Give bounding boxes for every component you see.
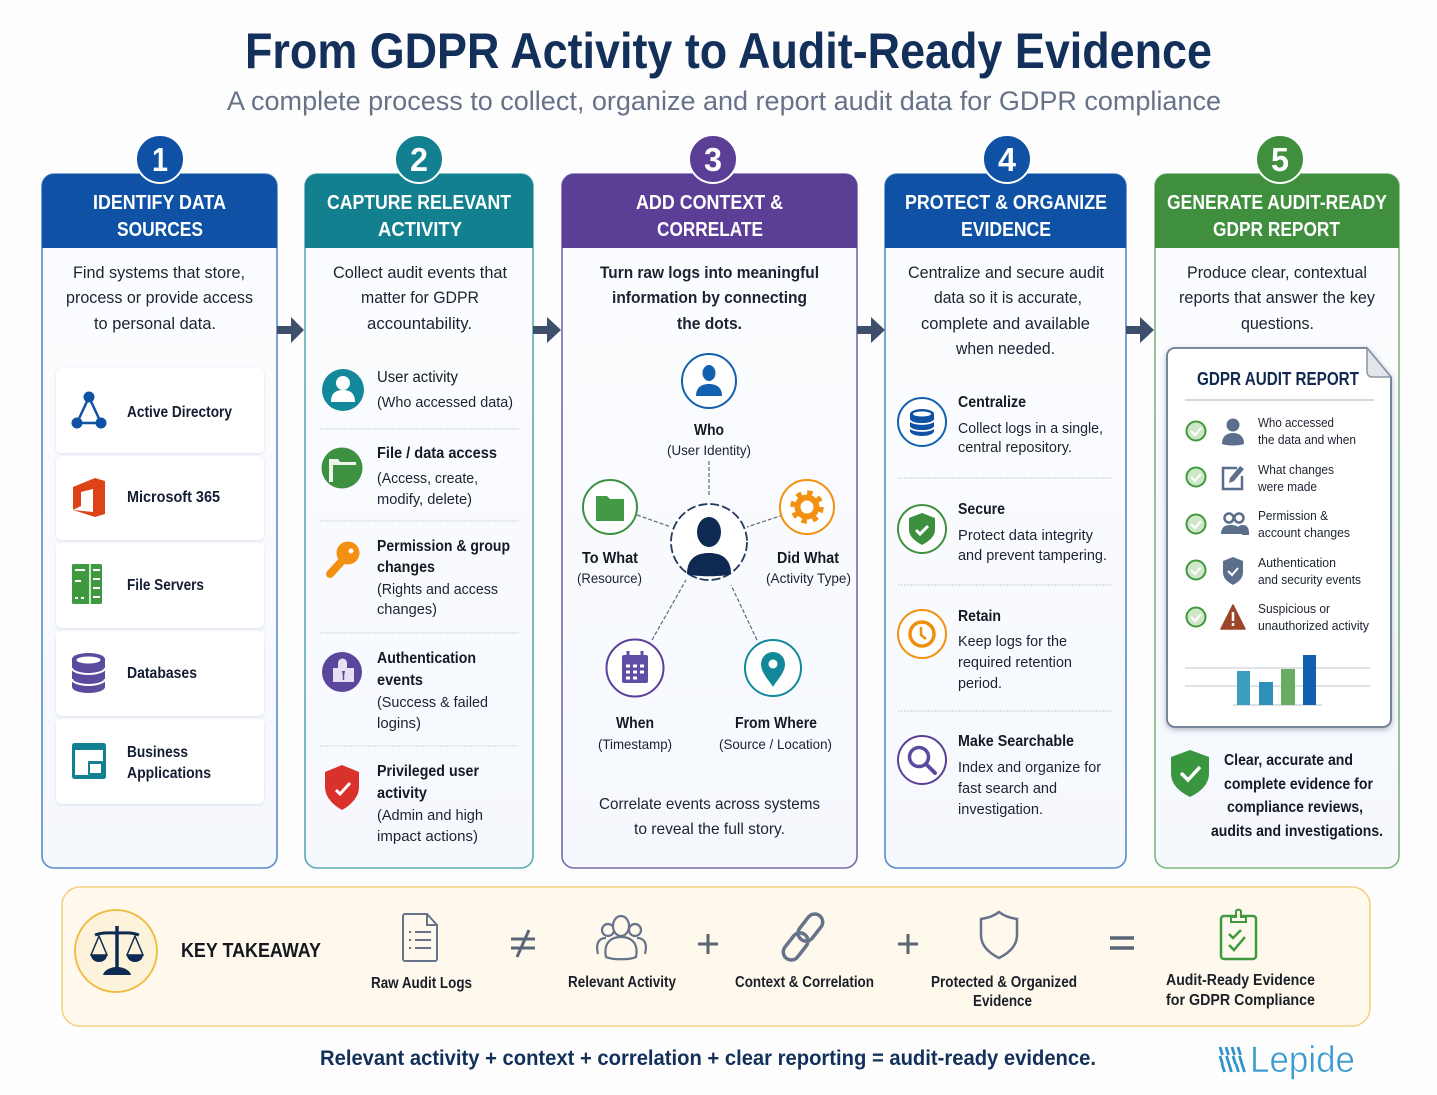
step badge 5 (1256, 135, 1304, 183)
description: process or provide access (66, 288, 253, 307)
node: did what: Did What (777, 550, 839, 567)
report title: GDPR AUDIT REPORT (1197, 369, 1359, 389)
item: retain: Keep logs for the (958, 633, 1067, 650)
node: who: (User Identity) (667, 442, 751, 458)
card: databases: Databases (127, 665, 197, 682)
panel 1: identify data sources (42, 135, 277, 868)
protected and organized evidence (931, 912, 1077, 1010)
hub connector lines (637, 461, 783, 640)
report row: what changes: were made (1257, 480, 1317, 494)
report row: who accessed: Who accessed (1258, 416, 1334, 430)
item: retain (898, 608, 1072, 692)
description: Collect audit events that (333, 263, 507, 282)
item: secure: Protect data integrity (958, 527, 1093, 544)
description (908, 263, 1104, 358)
heading: SOURCES (117, 219, 203, 241)
node: who: Who (694, 422, 724, 439)
report row: what changes (1186, 463, 1334, 494)
card: business applications (56, 719, 264, 804)
report conclusion with shield (1171, 750, 1383, 840)
heading: GDPR REPORT (1213, 219, 1340, 241)
item: file / data access: modify, delete) (377, 491, 472, 508)
panel 5: generate audit-ready report (1155, 135, 1399, 868)
heading (1167, 192, 1388, 241)
step badge 4 (983, 135, 1031, 183)
node: to what: To What (582, 550, 638, 567)
card: file servers (56, 543, 264, 628)
item: user activity (322, 369, 513, 411)
description (333, 263, 507, 333)
description: Centralize and secure audit (908, 263, 1104, 282)
heading: EVIDENCE (961, 219, 1051, 241)
relevant activity (568, 916, 676, 991)
item: centralize: Centralize (958, 394, 1026, 411)
card: business applications: Applications (127, 765, 211, 782)
node: when: (Timestamp) (598, 736, 672, 752)
heading (93, 192, 226, 241)
report row: what changes: What changes (1258, 463, 1334, 477)
footer formula: Relevant activity + context + correlation + clear reporting = audit-ready evidence. (320, 1047, 1096, 1070)
panel 3: add context and correlate (562, 135, 857, 868)
item: privileged user activity: Privileged user (377, 763, 479, 780)
report row: permission changes (1186, 509, 1350, 540)
raw audit logs (371, 914, 472, 992)
report row: authentication (1186, 556, 1361, 587)
card: file servers: File Servers (127, 577, 204, 594)
heading (905, 192, 1107, 241)
item: user activity: User activity (377, 369, 458, 386)
hub: central person (671, 504, 747, 580)
report conclusion with shield: complete evidence for (1224, 776, 1373, 793)
report row: suspicious (1186, 602, 1370, 633)
item: authentication events: logins) (377, 715, 421, 732)
report row: who accessed: the data and when (1258, 433, 1356, 447)
node: from where: From Where (735, 715, 817, 732)
closing note (599, 796, 820, 838)
node: to what: (Resource) (577, 570, 642, 586)
step badge 1 (136, 135, 184, 183)
closing note: Correlate events across systems (599, 796, 820, 813)
item: retain: Retain (958, 608, 1001, 625)
description: matter for GDPR (361, 288, 479, 307)
relevant activity: Relevant Activity (568, 974, 676, 991)
plus operator (898, 934, 918, 954)
report conclusion with shield: compliance reviews, (1227, 799, 1363, 816)
item: permission and group changes: changes (377, 559, 435, 576)
item: centralize: Collect logs in a single, (958, 420, 1103, 437)
description: information by connecting (612, 288, 807, 307)
description: the dots. (677, 314, 742, 333)
step badge 3: 3 (704, 141, 722, 178)
description (1179, 263, 1375, 333)
item: secure (898, 501, 1107, 564)
title: From GDPR Activity to Audit-Ready Evidence (245, 23, 1212, 79)
report row: suspicious: unauthorized activity (1258, 619, 1370, 633)
subtitle: A complete process to collect, organize and report audit data for GDPR compliance (227, 86, 1221, 116)
item: make searchable: Make Searchable (958, 733, 1074, 750)
key takeaway label: KEY TAKEAWAY (181, 940, 322, 962)
item: authentication events: (Success & failed (377, 694, 488, 711)
raw audit logs: Raw Audit Logs (371, 975, 472, 992)
item: secure: Secure (958, 501, 1005, 518)
not equal operator (511, 930, 535, 957)
item: permission and group changes: changes) (377, 601, 437, 618)
icon: scales (75, 910, 157, 992)
item: centralize (898, 394, 1103, 456)
step badge 5: 5 (1271, 141, 1289, 178)
audit-ready evidence (1166, 910, 1315, 1009)
item: make searchable (898, 733, 1101, 818)
description: accountability. (367, 314, 472, 333)
arrow 1 to 2 (277, 317, 304, 343)
key takeaway panel (62, 887, 1370, 1026)
item: permission and group changes (330, 538, 510, 618)
item: user activity: (Who accessed data) (377, 394, 513, 411)
step badge 2 (395, 135, 443, 183)
node: from where: (Source / Location) (719, 736, 832, 752)
item: make searchable: investigation. (958, 801, 1043, 818)
item: privileged user activity: impact actions) (377, 828, 478, 845)
card: active directory (56, 368, 264, 453)
equals operator (1110, 938, 1134, 948)
card: active directory: Active Directory (127, 404, 232, 421)
item: centralize: central repository. (958, 439, 1072, 456)
step badge 2: 2 (410, 141, 428, 178)
item: make searchable: fast search and (958, 780, 1057, 797)
report bar chart (1185, 655, 1370, 705)
item: file / data access (322, 445, 497, 508)
description: data so it is accurate, (934, 288, 1082, 307)
card: business applications: Business (127, 744, 188, 761)
card: databases (56, 631, 264, 716)
step badge 4: 4 (998, 141, 1017, 178)
protected and organized evidence: Evidence (973, 993, 1032, 1010)
description (600, 263, 819, 333)
heading: CAPTURE RELEVANT (327, 192, 511, 214)
description (66, 263, 253, 333)
card: microsoft 365 (56, 456, 264, 540)
lepide logo: Lepide (1250, 1039, 1355, 1080)
report row: permission changes: Permission & (1258, 509, 1329, 523)
heading: GENERATE AUDIT-READY (1167, 192, 1388, 214)
context and correlation: Context & Correlation (735, 974, 874, 991)
card: microsoft 365: Microsoft 365 (127, 489, 220, 506)
node: when: When (616, 715, 654, 732)
item: privileged user activity: activity (377, 785, 427, 802)
node: when (598, 640, 672, 752)
item: secure: and prevent tampering. (958, 547, 1107, 564)
report row: who accessed (1186, 416, 1356, 447)
heading: ADD CONTEXT & (636, 192, 783, 214)
heading (327, 192, 511, 241)
item: permission and group changes: (Rights and access (377, 581, 498, 598)
description: reports that answer the key (1179, 288, 1375, 307)
item: file / data access: (Access, create, (377, 470, 478, 487)
arrow 3 to 4 (857, 317, 885, 343)
description: Produce clear, contextual (1187, 263, 1367, 282)
node: did what: (Activity Type) (766, 570, 851, 586)
report row: authentication: and security events (1258, 573, 1361, 587)
panel 2: capture relevant activity (305, 135, 533, 868)
item: authentication events: Authentication (377, 650, 476, 667)
step badge 1: 1 (152, 141, 168, 178)
step badge 3 (689, 135, 737, 183)
description: when needed. (955, 339, 1055, 358)
report conclusion with shield: audits and investigations. (1211, 823, 1383, 840)
item: retain: period. (958, 675, 1002, 692)
description: questions. (1241, 314, 1314, 333)
report row: permission changes: account changes (1258, 526, 1350, 540)
node: did what (766, 480, 851, 586)
context and correlation (735, 911, 874, 991)
report conclusion with shield: Clear, accurate and (1224, 752, 1353, 769)
item: authentication events: events (377, 672, 423, 689)
item: privileged user activity (325, 763, 483, 845)
arrow 2 to 3 (533, 317, 561, 343)
report document (1167, 348, 1391, 727)
node: from where (719, 640, 832, 752)
audit-ready evidence: for GDPR Compliance (1166, 992, 1315, 1009)
item: permission and group changes: Permission & group (377, 538, 510, 555)
item: retain: required retention (958, 654, 1072, 671)
item: make searchable: Index and organize for (958, 759, 1101, 776)
protected and organized evidence: Protected & Organized (931, 974, 1077, 991)
description: Turn raw logs into meaningful (600, 263, 819, 282)
closing note: to reveal the full story. (634, 821, 785, 838)
item: file / data access: File / data access (377, 445, 497, 462)
heading (636, 192, 783, 241)
report row: suspicious: Suspicious or (1258, 602, 1330, 616)
description: Find systems that store, (73, 263, 245, 282)
description: complete and available (921, 314, 1090, 333)
panel 4: protect and organize evidence (885, 135, 1126, 868)
heading: ACTIVITY (378, 219, 463, 241)
node: who (667, 354, 751, 458)
heading: IDENTIFY DATA (93, 192, 226, 214)
arrow 4 to 5 (1126, 317, 1154, 343)
item: authentication events (322, 650, 488, 732)
audit-ready evidence: Audit-Ready Evidence (1166, 972, 1315, 989)
node: to what (577, 480, 642, 586)
heading: CORRELATE (657, 219, 763, 241)
description: to personal data. (94, 314, 216, 333)
report row: authentication: Authentication (1258, 556, 1336, 570)
heading: PROTECT & ORGANIZE (905, 192, 1107, 214)
item: privileged user activity: (Admin and high (377, 807, 483, 824)
plus operator (698, 934, 718, 954)
